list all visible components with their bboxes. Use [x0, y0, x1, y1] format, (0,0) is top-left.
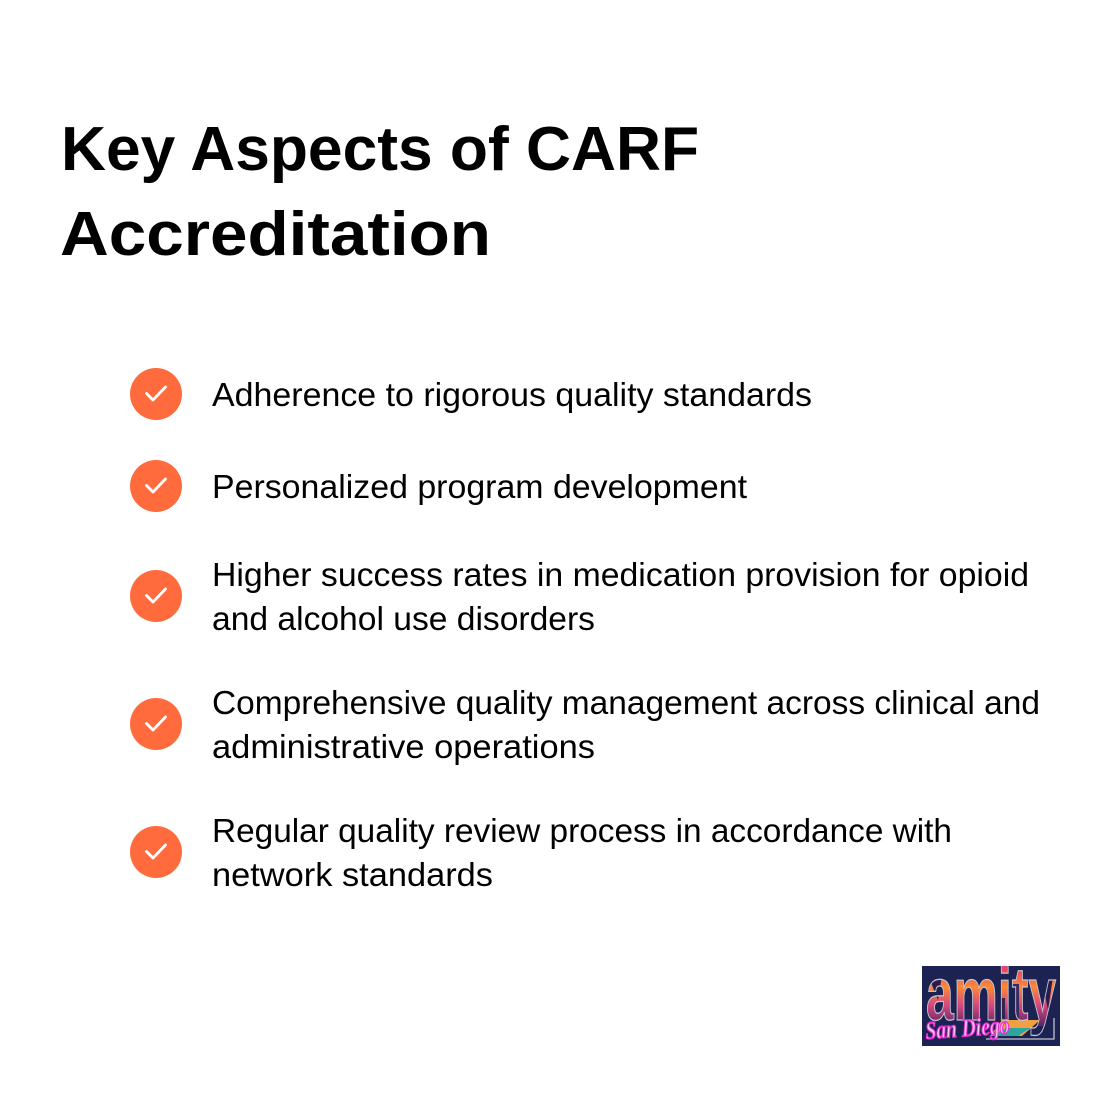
logo wordmark: amity [926, 952, 1056, 1036]
item 4 text: administrative operations [212, 728, 595, 765]
item 3 text [212, 556, 1029, 637]
item 5 text: Regular quality review process in accordance with [212, 812, 952, 849]
item 5 [130, 812, 952, 893]
item 5 text [212, 812, 952, 893]
item 2 [130, 460, 747, 512]
logo script: San Diego [925, 1012, 1010, 1045]
logo wordmark fill [922, 966, 1060, 1026]
checklist [130, 368, 1040, 893]
item 5 text: network standards [212, 856, 493, 893]
title: Accreditation [60, 200, 491, 269]
item 4 [130, 684, 1040, 765]
item 4 text [212, 684, 1040, 765]
item 2 text: Personalized program development [212, 468, 747, 505]
item 3 text: and alcohol use disorders [212, 600, 595, 637]
icon: check 3 [130, 570, 182, 622]
item 3 text: Higher success rates in medication provision for opioid [212, 556, 1029, 593]
item 1 [130, 368, 812, 420]
title: Key Aspects of CARF [61, 115, 699, 184]
logo stripe [990, 1020, 1040, 1036]
item 3 [130, 556, 1029, 637]
icon: check 5 [130, 826, 182, 878]
icon: check 4 [130, 698, 182, 750]
icon: check 1 [130, 368, 182, 420]
item 1 text: Adherence to rigorous quality standards [212, 376, 812, 413]
title [60, 115, 699, 269]
item 4 text: Comprehensive quality management across clinical and [212, 684, 1040, 721]
icon: check 2 [130, 460, 182, 512]
logo [922, 966, 1060, 1046]
logo frame [986, 1018, 1054, 1039]
